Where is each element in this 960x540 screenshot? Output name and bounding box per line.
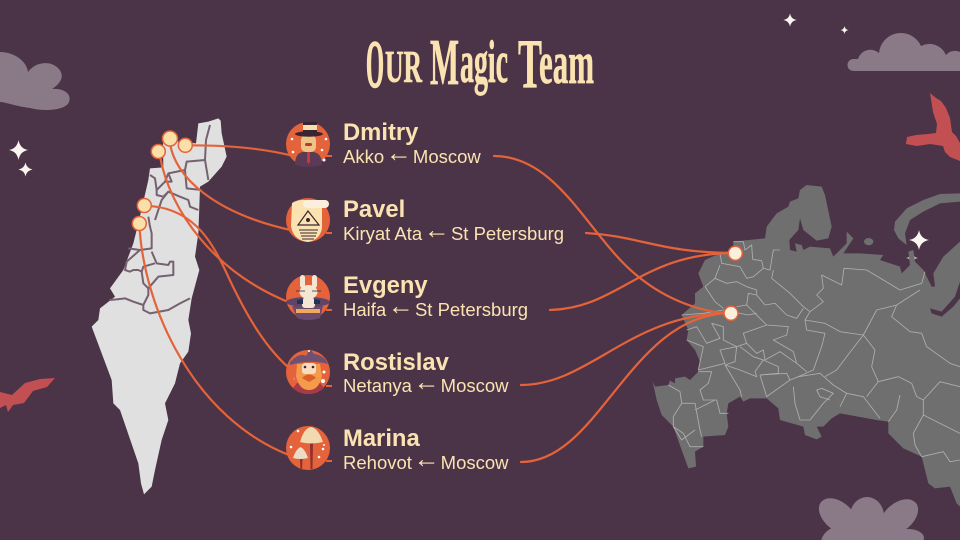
avatar: Rostislav <box>286 349 332 394</box>
route: Evgeny: Haifa <box>343 299 386 320</box>
name: Rostislav: Rostislav <box>343 349 450 376</box>
avatar: Dmitry <box>286 122 332 167</box>
title: T <box>518 26 542 103</box>
route: Pavel: St Petersburg <box>446 223 564 244</box>
title: M <box>430 26 459 99</box>
route: Dmitry: Moscow <box>408 146 481 167</box>
sparkles <box>9 14 929 264</box>
route: Rostislav: Moscow <box>436 375 509 396</box>
title: eam <box>539 30 594 96</box>
person: Evgeny <box>286 272 528 320</box>
route: Dmitry: ← <box>386 138 412 168</box>
connectors: names to Russia <box>494 156 735 462</box>
avatar: Pavel <box>286 198 332 242</box>
name: Marina: Marina <box>343 425 420 452</box>
markers: Israeli cities <box>132 131 192 230</box>
Israel landmass <box>92 118 227 494</box>
map: Russia <box>653 185 960 507</box>
Israel district borders <box>109 125 210 313</box>
markers: Russian cities <box>724 246 742 320</box>
cloud: top right <box>847 33 960 71</box>
person: Rostislav <box>286 349 509 396</box>
Russia landmass <box>653 185 960 507</box>
Russia region borders <box>668 242 960 462</box>
cloud: top left <box>0 52 70 110</box>
title: agic <box>460 29 508 95</box>
route: Pavel: ← <box>424 214 450 244</box>
avatar: Marina <box>286 426 332 470</box>
route: Rostislav: Netanya <box>343 375 412 396</box>
map: Israel <box>92 118 227 494</box>
route: Marina: Moscow <box>436 452 509 473</box>
route: Evgeny: ← <box>388 290 414 320</box>
route: Evgeny: St Petersburg <box>410 299 528 320</box>
title: UR <box>385 42 422 92</box>
avatar: Evgeny <box>286 275 332 320</box>
person: Dmitry <box>286 119 481 168</box>
name: Pavel: Pavel <box>343 196 405 223</box>
route: Rostislav: ← <box>413 366 439 396</box>
title: O <box>366 26 384 102</box>
route: Dmitry: Akko <box>343 146 384 167</box>
person: Pavel <box>286 196 564 244</box>
name: Dmitry: Dmitry <box>343 119 419 146</box>
route: Marina: ← <box>413 444 439 474</box>
Novaya Zemlya and islands <box>864 193 960 245</box>
cloud: bottom right <box>812 491 925 540</box>
person: Marina <box>286 425 509 474</box>
bird: top right <box>906 93 960 161</box>
route: Pavel: Kiryat Ata <box>343 223 422 244</box>
route: Marina: Rehovot <box>343 452 412 473</box>
connectors: Israel to avatars <box>139 143 293 457</box>
name: Evgeny: Evgeny <box>343 272 428 299</box>
bird: left <box>0 378 55 412</box>
